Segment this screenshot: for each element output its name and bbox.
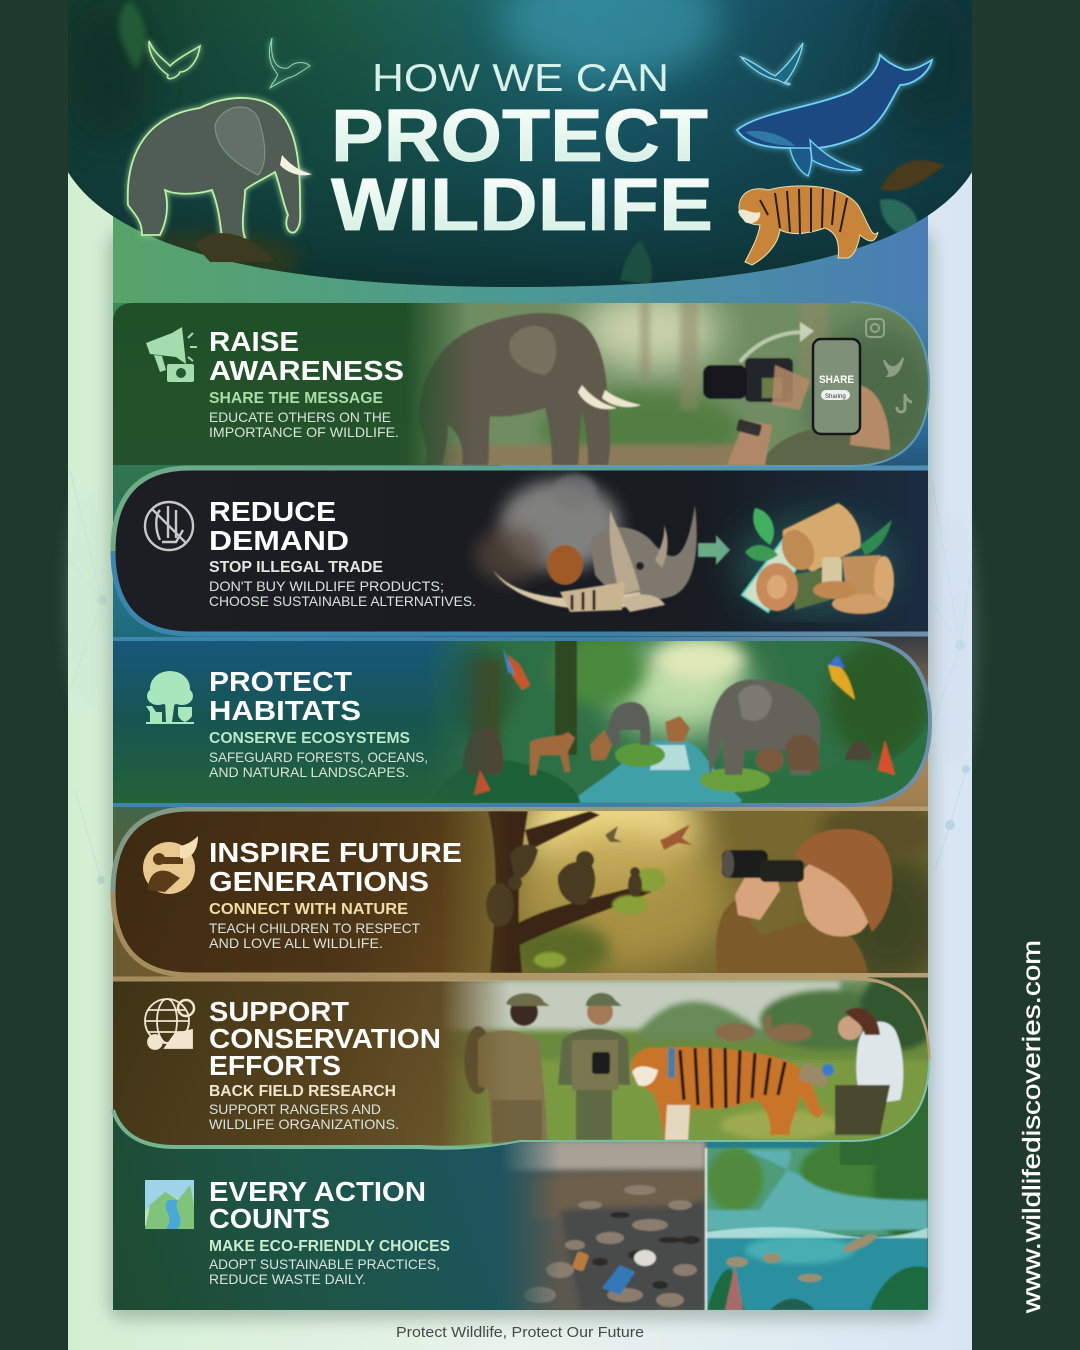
description: WILDLIFE ORGANIZATIONS. [209, 1116, 399, 1132]
heading: GENERATIONS [209, 866, 429, 897]
description: SUPPORT RANGERS AND [209, 1101, 381, 1117]
protect: PROTECT [331, 94, 708, 177]
elephant [418, 313, 641, 465]
tree [488, 811, 652, 973]
glowing bird outline right [741, 43, 803, 85]
website url: www.wildlifediscoveries.com [1018, 940, 1046, 1314]
phone [813, 339, 860, 434]
glowing whale [737, 55, 932, 176]
heading: EFFORTS [209, 1050, 341, 1081]
heading: CONSERVATION [209, 1023, 441, 1054]
heading: PROTECT [209, 666, 352, 697]
description: IMPORTANCE OF WILDLIFE. [209, 424, 399, 440]
heading: COUNTS [209, 1203, 330, 1234]
heading [209, 496, 349, 556]
how we can: HOW WE CAN [372, 57, 669, 100]
subheading: MAKE ECO-FRIENDLY CHOICES [209, 1238, 450, 1255]
panel: every action counts [113, 1116, 928, 1310]
arrow [698, 535, 730, 565]
icon: megaphone and camera [146, 327, 197, 382]
photo: jungle scene with animals [425, 635, 930, 808]
photo: poached rhino to sustainable wood [475, 474, 895, 615]
heading: SUPPORT [209, 996, 349, 1027]
wood logs [735, 503, 895, 615]
foliage [430, 720, 928, 803]
header banner [65, 0, 975, 290]
heading [209, 1176, 426, 1234]
social icons [866, 319, 912, 412]
description: AND NATURAL LANDSCAPES. [209, 764, 409, 780]
tiger [631, 1047, 830, 1140]
tusks and remains [493, 545, 665, 612]
monkeys [486, 845, 642, 927]
heading: RAISE [209, 326, 299, 357]
photo: polluted and clear river [504, 1100, 928, 1310]
photo: rangers, tiger and scientist [444, 980, 928, 1148]
description [209, 578, 476, 609]
elephants [608, 679, 821, 775]
description: CHOOSE SUSTAINABLE ALTERNATIVES. [209, 593, 476, 609]
panel: raise awareness [113, 301, 930, 467]
subheading: CONSERVE ECOSYSTEMS [209, 730, 410, 747]
description: SAFEGUARD FORESTS, OCEANS, [209, 749, 428, 765]
heading: DEMAND [209, 525, 349, 556]
rock under elephant [195, 233, 275, 262]
subheading: STOP ILLEGAL TRADE [209, 559, 383, 576]
deer and monkeys [530, 716, 690, 775]
icon: map [145, 1180, 194, 1229]
description [209, 1256, 440, 1287]
child [716, 829, 892, 973]
leaves [534, 868, 666, 968]
main panel background [113, 170, 928, 1310]
heading [209, 996, 441, 1081]
parrots and flowers [474, 648, 895, 795]
icon: globe and animals [145, 999, 194, 1049]
heading: HABITATS [209, 695, 361, 726]
description: TEACH CHILDREN TO RESPECT [209, 920, 420, 936]
description: EDUCATE OTHERS ON THE [209, 409, 391, 425]
description: REDUCE WASTE DAILY. [209, 1271, 366, 1287]
heading: EVERY ACTION [209, 1176, 426, 1207]
heading [209, 666, 361, 726]
description: ADOPT SUSTAINABLE PRACTICES, [209, 1256, 440, 1272]
panel: reduce demand [113, 468, 928, 634]
title [331, 57, 713, 246]
icon: no hand [145, 502, 193, 550]
heading [209, 326, 404, 386]
description [209, 1101, 399, 1132]
decorative globe network left and right [66, 470, 977, 884]
birds [605, 825, 692, 850]
description: DON'T BUY WILDLIFE PRODUCTS; [209, 578, 444, 594]
deer [715, 1015, 812, 1042]
phone: SHARE [819, 374, 854, 386]
description [209, 920, 420, 951]
heading: REDUCE [209, 496, 336, 527]
scientist [798, 1008, 903, 1135]
description [209, 409, 399, 440]
subheading: SHARE THE MESSAGE [209, 390, 383, 407]
footer tagline: Protect Wildlife, Protect Our Future [396, 1325, 644, 1341]
curved arrow [740, 332, 805, 362]
description: AND LOVE ALL WILDLIFE. [209, 935, 383, 951]
ranger right [558, 993, 630, 1140]
wildlife: WILDLIFE [331, 163, 713, 246]
subheading: BACK FIELD RESEARCH [209, 1083, 396, 1100]
panel shadow [108, 230, 933, 1320]
glowing elephant [128, 98, 312, 238]
subheading: CONNECT WITH NATURE [209, 901, 408, 918]
jungle backdrop [65, 0, 975, 290]
description [209, 749, 428, 780]
icon: tree with deer and shield [146, 671, 194, 724]
ranger left [464, 993, 550, 1146]
photographer [703, 358, 895, 470]
heading: AWARENESS [209, 355, 404, 386]
tiger [738, 186, 878, 265]
icon: child silhouette circle [143, 836, 198, 894]
panel: support conservation efforts [113, 970, 940, 1150]
river [570, 740, 745, 803]
heading [209, 837, 462, 897]
photo: elephant and camera [412, 303, 928, 465]
dust cloud [475, 474, 620, 583]
phone: Sharing [825, 394, 846, 400]
glowing bird outlines left [149, 38, 310, 88]
heading: INSPIRE FUTURE [209, 837, 462, 868]
photo: child with binoculars watching monkeys [448, 811, 928, 973]
rhino [590, 505, 697, 600]
panel: protect habitats [113, 635, 930, 808]
panel: inspire future generations [110, 806, 928, 978]
